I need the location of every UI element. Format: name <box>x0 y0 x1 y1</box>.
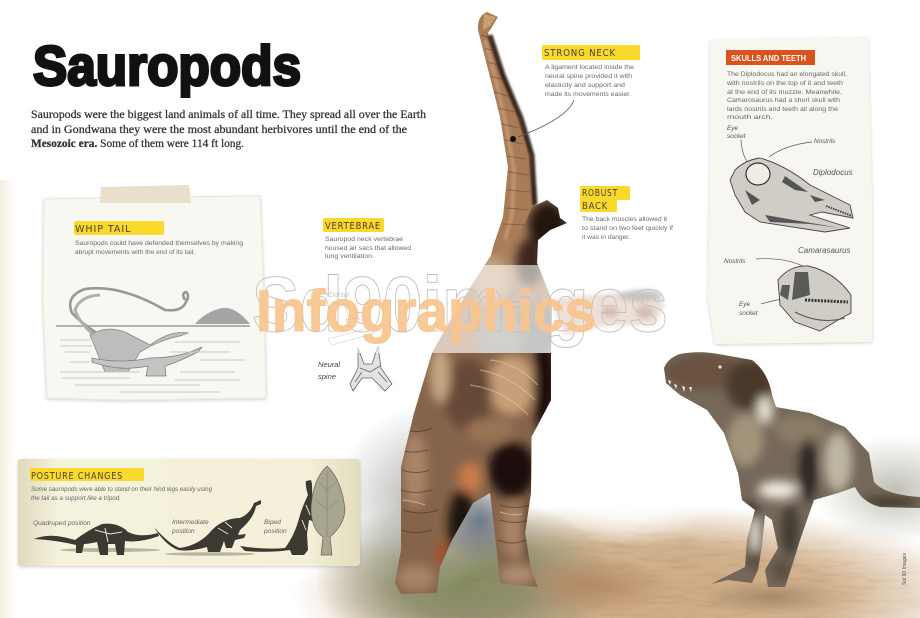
figure: intermediate <box>154 500 261 556</box>
watermark: infographics: Infographics <box>256 279 596 344</box>
figure: biped: Biped <box>264 519 281 526</box>
heading: skulls and teeth: SKULLS AND TEETH <box>731 54 806 63</box>
neck and head <box>478 12 535 260</box>
skulls description: The Diplodocus had an elongated skull, <box>727 71 847 78</box>
intro text: Sauropods were the biggest land animals of all time. They spread all over the Earth <box>31 107 426 121</box>
heading: robust back: ROBUST <box>582 188 618 199</box>
robust back description <box>582 216 673 241</box>
robust back description: The back muscles allowed it <box>582 216 667 223</box>
camarasaurus skull: Camarasaurus <box>798 246 850 255</box>
strong neck description: elasticity and support and <box>545 82 625 89</box>
skulls description: Camarosaurus had a short skull with <box>727 97 840 104</box>
tree <box>311 466 345 555</box>
label: neural spine: spine <box>318 372 336 381</box>
photo credit: Sol 90 Images <box>902 553 908 585</box>
panel: vertebrae <box>318 218 411 391</box>
watermark: outlined wordmark: Sd90images <box>252 260 668 348</box>
camarasaurus skull: Nostrils <box>724 258 746 265</box>
camarasaurus skull: socket <box>739 310 758 317</box>
vertebrae description: Sauropod neck vertebrae <box>325 236 403 243</box>
robust back description: it was in danger. <box>582 234 630 241</box>
intro text: and in Gondwana they were the most abundant herbivores until the end of the <box>31 122 407 136</box>
vertebrae description: lung ventilation. <box>325 253 374 260</box>
camarasaurus skull <box>724 246 851 331</box>
diplodocus skull: Diplodocus <box>813 168 853 177</box>
strong neck description <box>545 64 634 98</box>
title: Sauropods <box>33 34 301 97</box>
whip tail description: Sauropods could have defended themselves by making <box>75 240 243 247</box>
panel: whip tail <box>43 185 266 400</box>
paper card <box>43 196 266 400</box>
heading: whip tail: WHIP TAIL <box>75 224 131 235</box>
panel: skulls and teeth <box>708 37 872 344</box>
heading: vertebrae: VERTEBRAE <box>325 221 381 232</box>
figure: biped <box>240 466 345 555</box>
vertebra side sketch <box>328 303 375 345</box>
t-rex illustration <box>660 350 920 590</box>
robust back description: to stand on two feet quickly if <box>582 225 673 232</box>
camarasaurus skull: Eye <box>739 301 750 308</box>
heading: strong neck: STRONG NECK <box>544 48 616 59</box>
heading: robust back <box>580 186 630 212</box>
panel: strong neck <box>510 45 640 142</box>
heading: whip tail <box>74 221 164 235</box>
sauropod illustration <box>390 12 665 600</box>
torso and legs <box>395 353 551 594</box>
figure: quadruped: Quadruped position <box>33 520 91 527</box>
label: dorsal: Dorsal <box>329 292 350 299</box>
strong neck description: neural spine provided it with <box>545 73 632 80</box>
callout line <box>510 100 574 142</box>
skulls description <box>726 71 847 121</box>
ground and mist background <box>302 416 920 618</box>
panel: posture changes <box>18 459 360 566</box>
skulls description: with nostrils on the top of it and teeth <box>726 80 843 87</box>
skulls description: lards nostrils and teeth all along the <box>727 106 838 113</box>
label: neural spine: Neural <box>318 360 340 369</box>
whip tail description <box>75 240 243 256</box>
diplodocus skull: socket <box>727 133 746 140</box>
t-rex teeth and eye <box>668 365 722 392</box>
panel: robust back <box>580 186 673 241</box>
posture description <box>31 486 212 502</box>
figure: intermediate: position <box>171 528 195 535</box>
intro text <box>31 107 426 150</box>
diplodocus skull <box>727 125 853 232</box>
figure: quadruped <box>33 520 160 555</box>
posture description: Some sauropods were able to stand on their hind legs easily using <box>31 486 212 493</box>
whip tail description: abrupt movements with the end of its tail. <box>75 249 195 256</box>
strong neck description: made its movements easier. <box>545 91 631 98</box>
heading: robust back: BACK <box>582 201 608 212</box>
vertebrae description: housed air sacs that allowed <box>325 245 411 252</box>
diplodocus skull: Nostrils <box>814 138 836 145</box>
neural spine sketch <box>350 346 392 391</box>
raised foreleg <box>430 195 570 358</box>
vertebrae description <box>325 236 411 260</box>
posture description: the tail as a support like a tripod. <box>31 495 121 502</box>
watermark band <box>270 265 680 353</box>
paper card <box>708 37 872 344</box>
skulls description: at the end of its muzzle. Meanwhile, <box>727 89 842 96</box>
figure: intermediate: Intermediate <box>172 519 209 526</box>
strong neck description: A ligament located inside the <box>545 64 634 71</box>
tape <box>100 185 191 203</box>
heading: posture changes: POSTURE CHANGES <box>31 471 123 482</box>
diplodocus skull: Eye <box>727 125 738 132</box>
label: neural spine <box>318 360 340 381</box>
intro text: Mesozoic era. Some of them were 114 ft long. <box>31 136 244 150</box>
skulls description: mouth arch. <box>727 114 773 121</box>
back arm washed <box>550 290 665 335</box>
parchment card <box>18 459 360 566</box>
heading: skulls and teeth <box>726 50 815 65</box>
figure: biped: position <box>263 528 287 535</box>
sketch: sauropods at water <box>56 288 250 392</box>
